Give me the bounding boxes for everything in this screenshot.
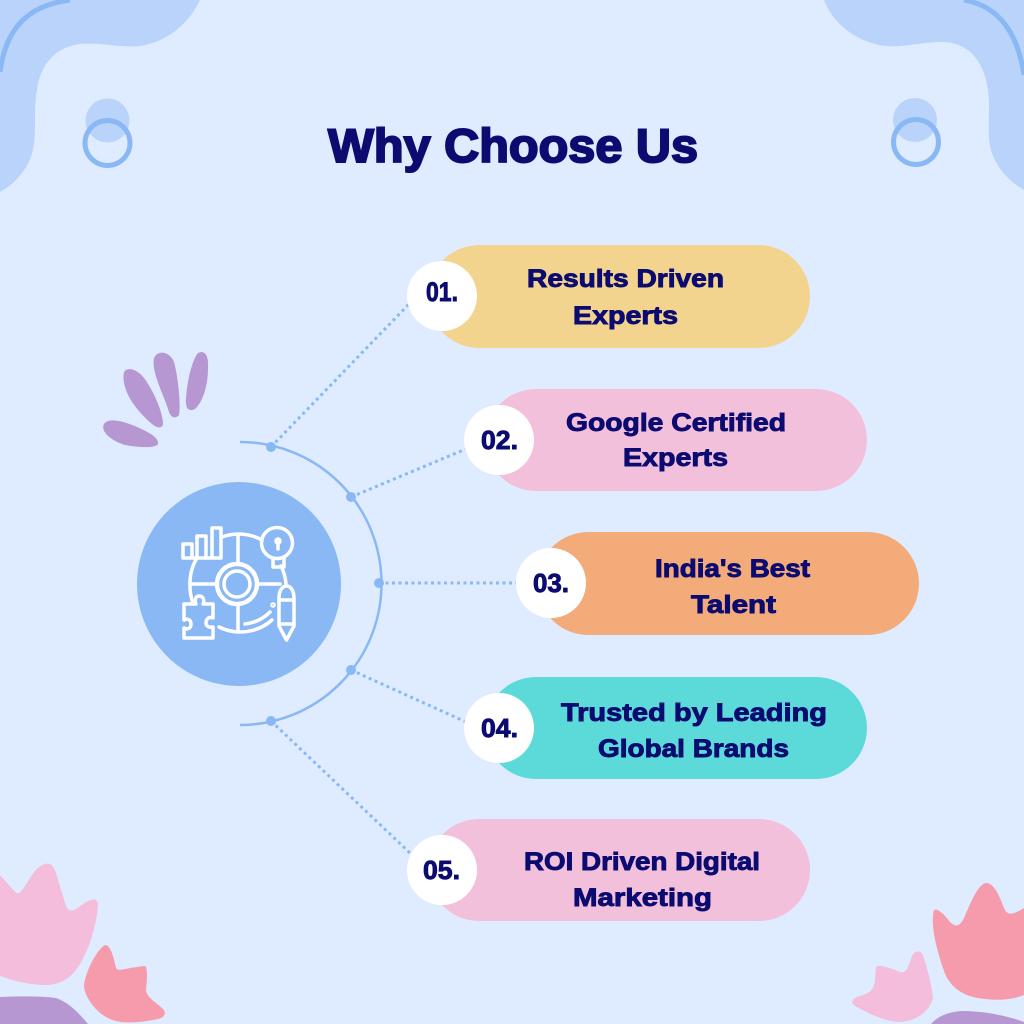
label 3: Talent <box>691 591 777 619</box>
number 3: 03. <box>533 568 569 598</box>
central circle <box>137 482 341 686</box>
label 4: Global Brands <box>598 735 789 763</box>
top-left corner blob <box>0 0 200 192</box>
label 4 <box>561 699 827 763</box>
label 3 <box>655 555 811 619</box>
badge 2 <box>464 405 534 475</box>
label 2: Google Certified <box>566 409 786 437</box>
label 2 <box>566 409 786 472</box>
connector arc <box>240 442 382 725</box>
number 4: 04. <box>481 713 518 743</box>
number 2: 02. <box>481 425 518 455</box>
icon: strategy globe with gear, chart, bulb, puzzle, pencil <box>183 528 294 640</box>
pill 2 <box>485 389 867 491</box>
label 3: India's Best <box>655 555 811 583</box>
item 1 <box>407 245 810 348</box>
top-right corner blob <box>824 0 1024 190</box>
pill 4 <box>485 677 867 779</box>
label 1: Experts <box>573 302 678 330</box>
pill 5 <box>428 819 810 921</box>
item 4 <box>464 677 867 779</box>
connector nodes <box>266 442 384 726</box>
label 4: Trusted by Leading <box>561 699 827 727</box>
bottom-left flowers <box>0 864 165 1024</box>
label 5 <box>524 848 760 912</box>
badge 5 <box>407 835 477 905</box>
label 5: Marketing <box>573 884 712 912</box>
number 5: 05. <box>423 855 460 885</box>
badge 3 <box>516 548 586 618</box>
item 5 <box>407 819 810 921</box>
badge 4 <box>464 693 534 763</box>
label 1: Results Driven <box>527 265 724 293</box>
label 5: ROI Driven Digital <box>524 848 760 876</box>
top-right ring ornament <box>893 98 938 164</box>
item 2 <box>464 389 867 491</box>
top-left ring ornament <box>85 98 130 166</box>
badge 1 <box>407 261 477 331</box>
dotted connectors <box>271 303 516 853</box>
bottom-right flowers <box>852 883 1024 1024</box>
pill 3 <box>537 532 919 635</box>
decorative purple leaves <box>103 352 208 447</box>
label 1 <box>527 265 724 330</box>
number 1: 01. <box>426 277 458 307</box>
pill 1 <box>428 245 810 348</box>
label 2: Experts <box>623 444 728 472</box>
title: Why Choose Us <box>328 119 698 172</box>
item 3 <box>516 532 919 635</box>
